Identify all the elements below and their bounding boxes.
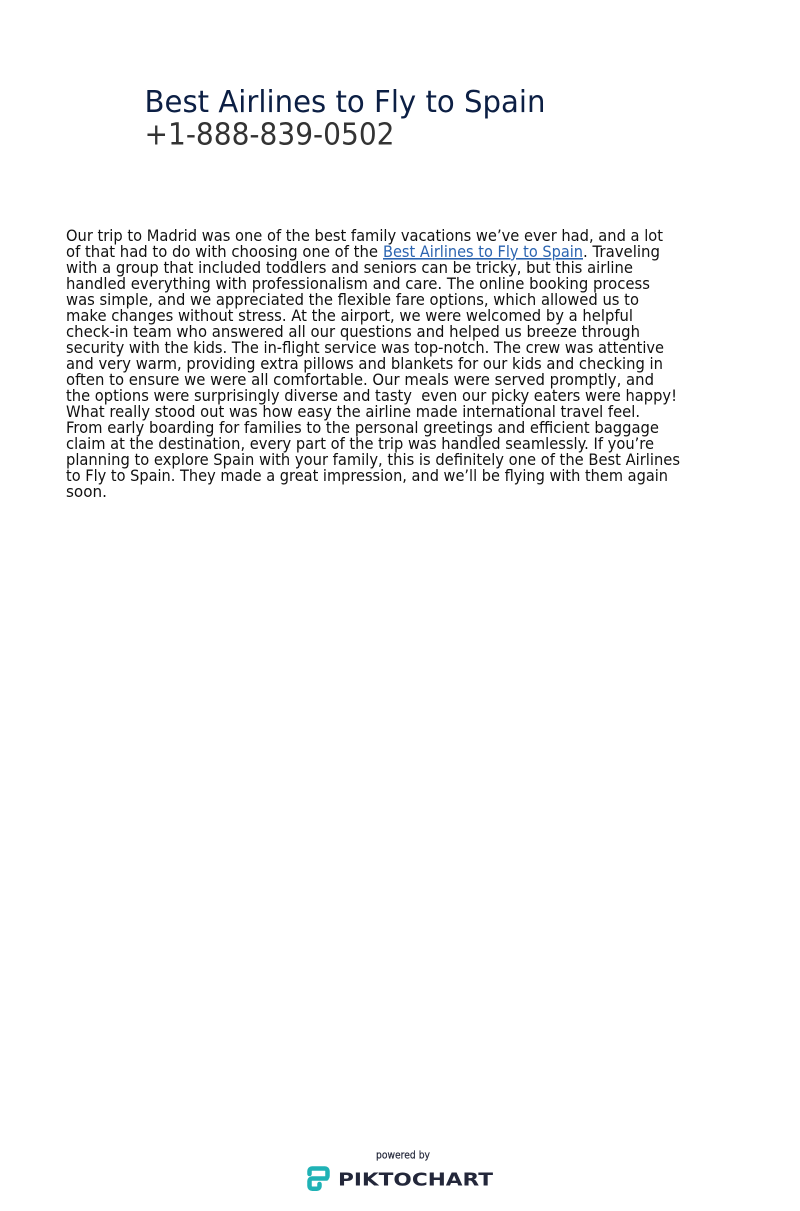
body paragraph: planning to explore Spain with your family, this is definitely one of the Best Airlines bbox=[66, 450, 680, 469]
body paragraph: with a group that included toddlers and seniors can be tricky, but this airline bbox=[66, 258, 633, 277]
powered by label: powered by bbox=[376, 1150, 430, 1162]
body paragraph: What really stood out was how easy the airline made international travel feel. bbox=[66, 402, 640, 421]
body paragraph: From early boarding for families to the personal greetings and efficient baggage bbox=[66, 418, 659, 437]
body paragraph: soon. bbox=[66, 482, 107, 501]
body paragraph: often to ensure we were all comfortable. Our meals were served promptly, and bbox=[66, 370, 654, 389]
title: Best Airlines to Fly to Spain bbox=[144, 85, 546, 120]
body paragraph bbox=[66, 226, 680, 501]
body paragraph: the options were surprisingly diverse and tasty even our picky eaters were happy! bbox=[66, 386, 677, 405]
body paragraph: handled everything with professionalism and care. The online booking process bbox=[66, 274, 650, 293]
body paragraph: of that had to do with choosing one of the bbox=[66, 242, 378, 261]
title: +1-888-839-0502 bbox=[144, 118, 394, 152]
body paragraph: security with the kids. The in-flight service was top-notch. The crew was attentive bbox=[66, 338, 664, 357]
link: Best Airlines to Fly to Spain bbox=[383, 242, 583, 261]
body paragraph: and very warm, providing extra pillows and blankets for our kids and checking in bbox=[66, 354, 663, 373]
body paragraph: was simple, and we appreciated the flexible fare options, which allowed us to bbox=[66, 290, 639, 309]
icon: Piktochart logo bbox=[310, 1168, 328, 1189]
body paragraph: to Fly to Spain. They made a great impression, and we’ll be flying with them again bbox=[66, 466, 668, 485]
body paragraph: Our trip to Madrid was one of the best family vacations we’ve ever had, and a lot bbox=[66, 226, 663, 245]
body paragraph: claim at the destination, every part of the trip was handled seamlessly. If you’re bbox=[66, 434, 654, 453]
title bbox=[144, 85, 546, 152]
body paragraph: . Traveling bbox=[583, 242, 660, 261]
body paragraph: check-in team who answered all our questions and helped us breeze through bbox=[66, 322, 640, 341]
body paragraph: make changes without stress. At the airport, we were welcomed by a helpful bbox=[66, 306, 633, 325]
footer: powered by Piktochart bbox=[310, 1150, 494, 1190]
wordmark: PIKTOCHART bbox=[338, 1170, 494, 1190]
